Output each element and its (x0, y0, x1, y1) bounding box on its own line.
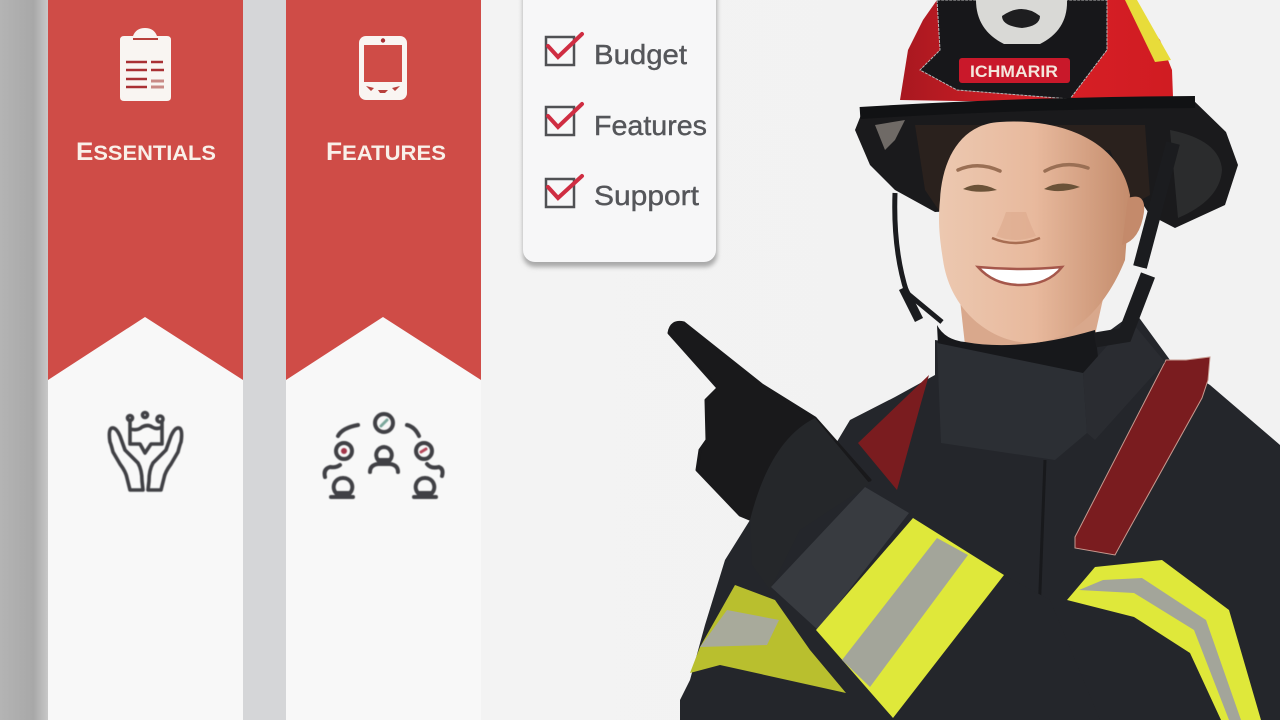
near arm sleeve (893, 575, 1100, 720)
heading: Essentials: ESSENTIALS (76, 138, 216, 166)
helmet shield (920, 0, 1107, 99)
checklist item: Support (546, 176, 699, 211)
icon: tablet (359, 36, 407, 100)
firefighter figure (669, 0, 1280, 720)
checklist item: Support: Support (594, 180, 699, 211)
right collar flap (1083, 320, 1165, 440)
glove cuff (750, 418, 870, 590)
nose (992, 238, 1040, 243)
panel: features (286, 0, 481, 720)
helmet name plate: ICHMARIR (970, 62, 1058, 81)
inner black collar (937, 325, 1100, 378)
red chevron banner: features (286, 0, 481, 380)
face (939, 122, 1144, 343)
smile (978, 267, 1062, 285)
icon: hands holding (109, 412, 182, 490)
panel: checklist card (523, 0, 717, 267)
glove pointing (669, 322, 870, 560)
helmet (860, 0, 1195, 113)
hair (915, 125, 1150, 215)
nose shade (996, 212, 1036, 240)
checklist item: Budget: Budget (594, 39, 687, 70)
front placket seam (1035, 460, 1045, 720)
neck (960, 290, 1105, 348)
helmet dome (900, 0, 1173, 102)
helmet brim underside (855, 97, 1238, 228)
shoulder reflective band (1067, 560, 1261, 720)
near arm reflective band (816, 518, 1004, 718)
eyes (963, 183, 1080, 192)
jacket collar (937, 343, 1087, 460)
sleeve cuff (771, 487, 909, 630)
red chevron banner: essentials (48, 0, 243, 380)
helmet stripe (1125, 0, 1171, 62)
left red strap (858, 375, 929, 490)
far arm reflective band (690, 585, 846, 693)
eyebrows (958, 165, 1088, 171)
left brim hardware (875, 120, 905, 150)
helmet emblem (976, 0, 1067, 44)
right brim interior (1170, 130, 1222, 218)
checklist item: Features: Features (594, 110, 707, 141)
icon: clipboard (120, 28, 171, 101)
checklist item: Budget (546, 34, 687, 70)
right red strap (1075, 357, 1210, 555)
helmet name plate (959, 58, 1070, 83)
checklist item: Features (546, 104, 707, 141)
brim edge (860, 102, 1195, 113)
icon: people network (325, 414, 443, 497)
chin straps (895, 143, 1173, 340)
jacket body (680, 312, 1280, 720)
panel: essentials (48, 0, 243, 720)
heading: Features: FEATURES (326, 138, 446, 166)
